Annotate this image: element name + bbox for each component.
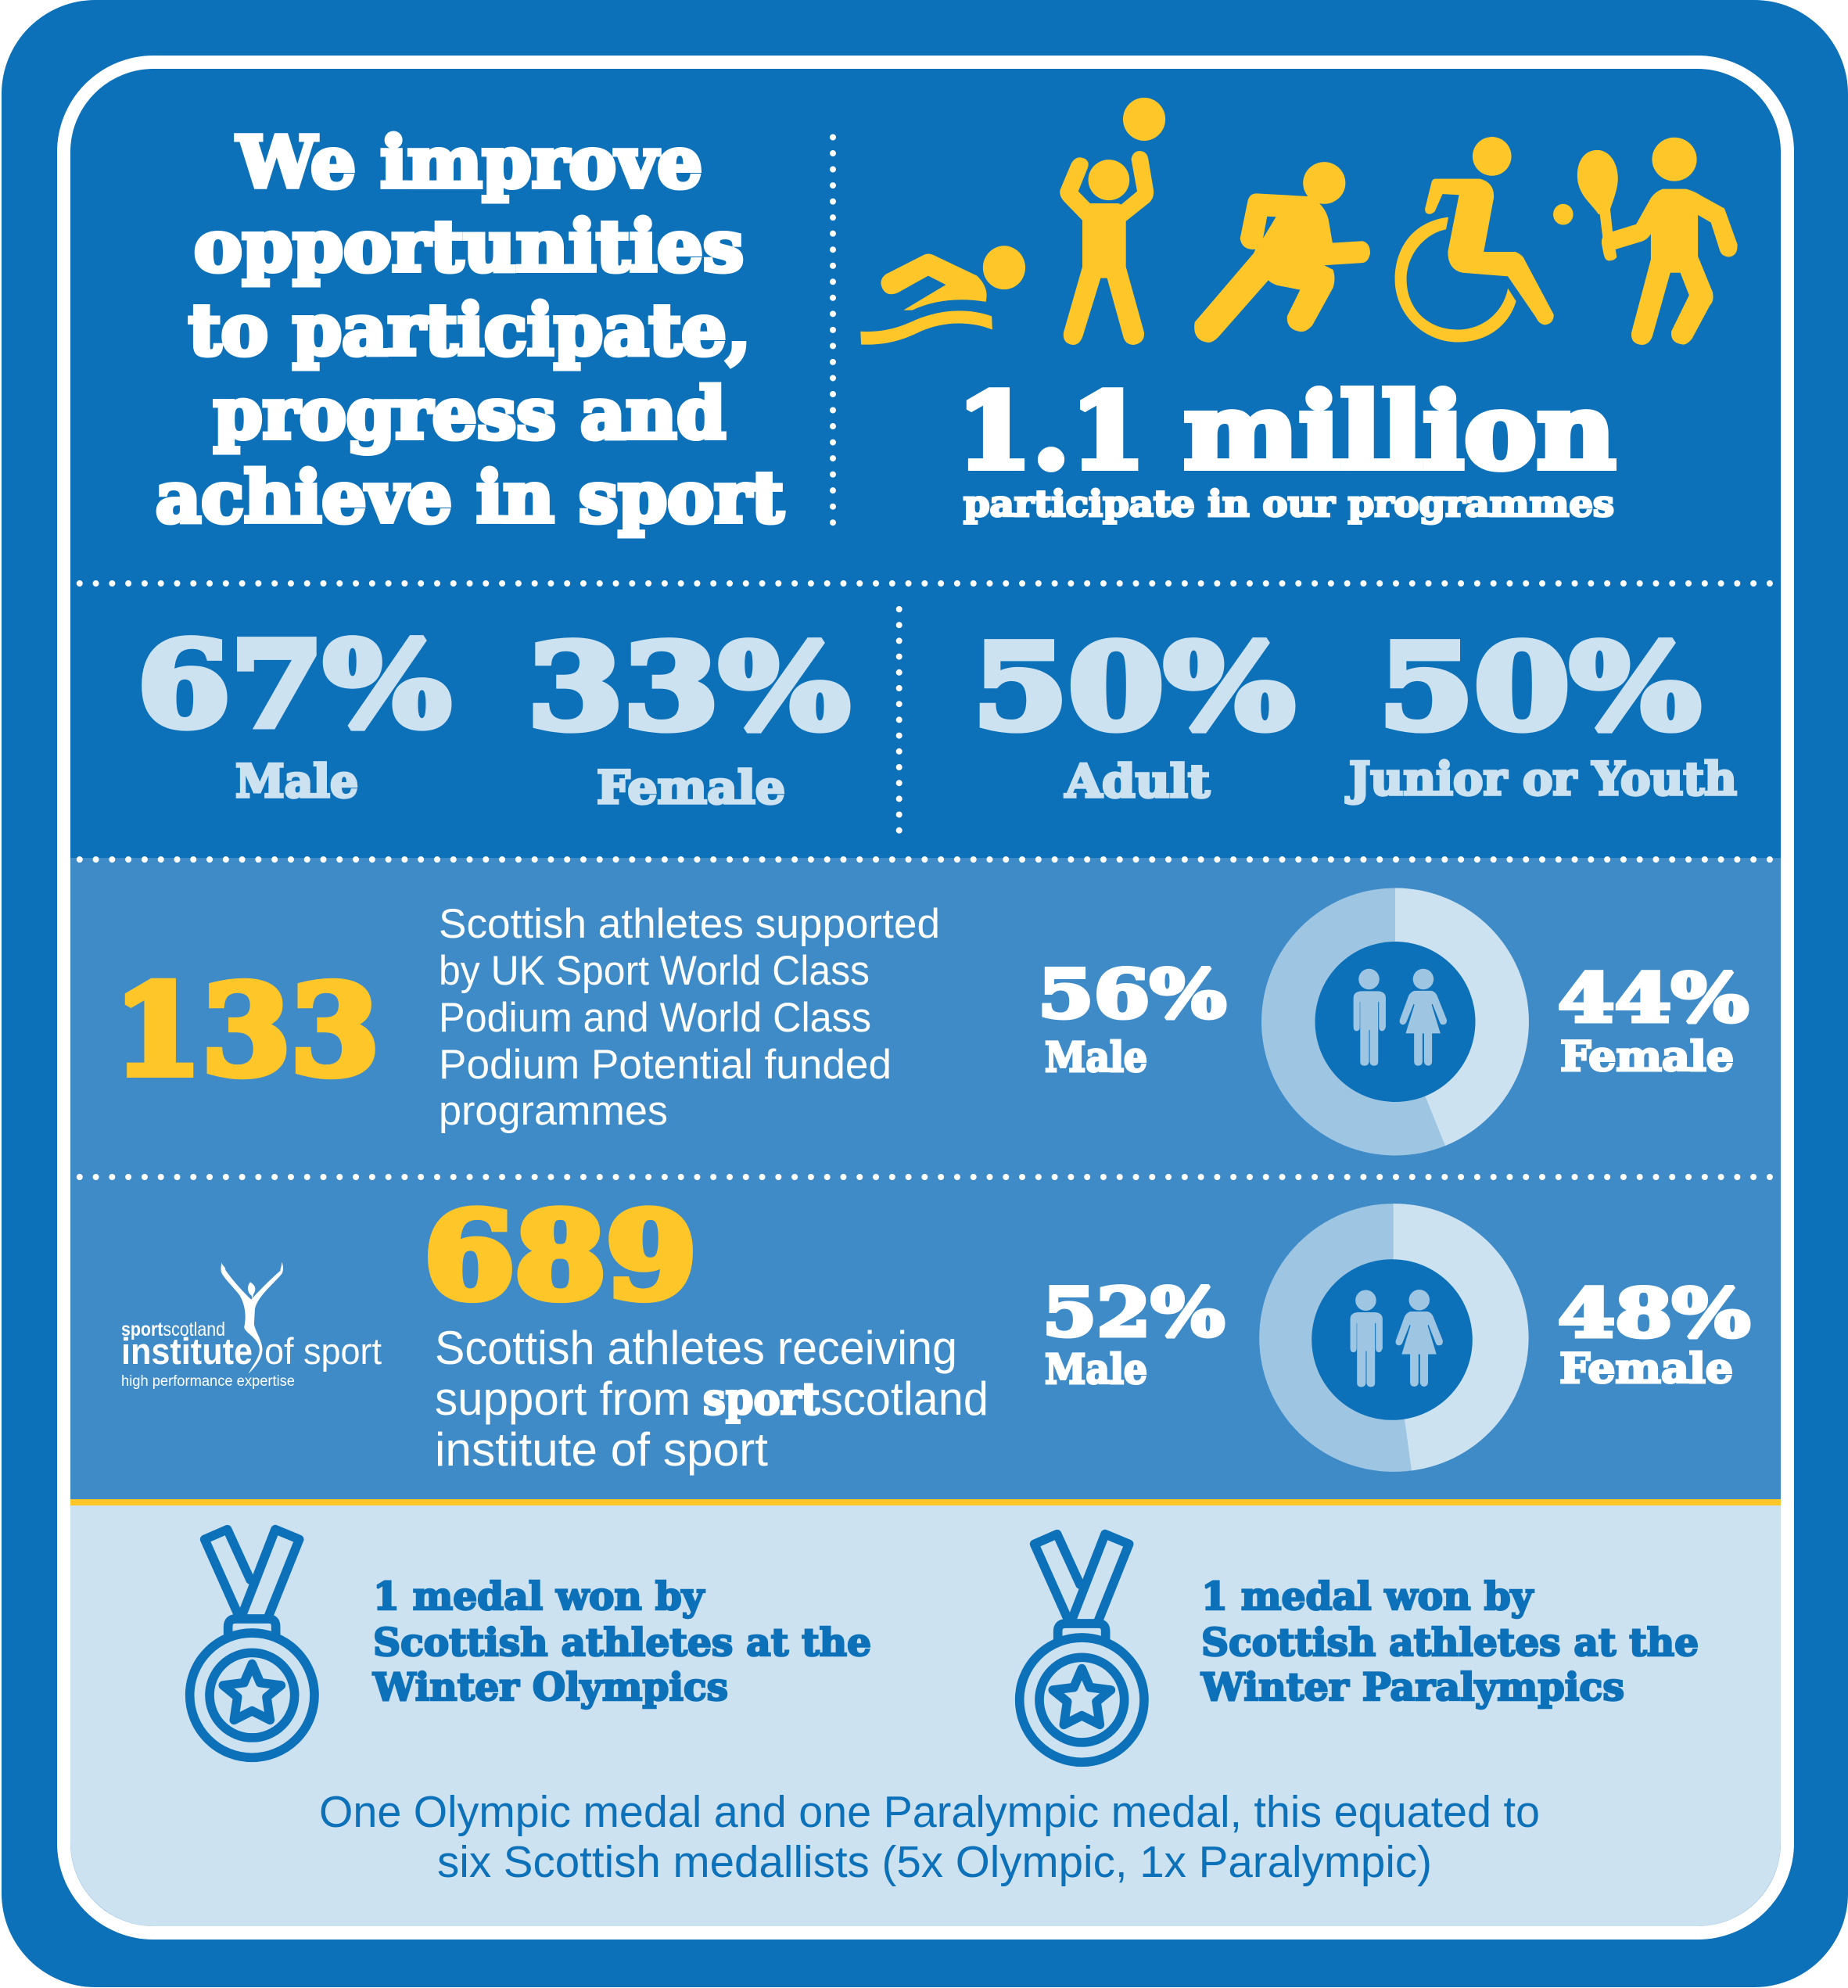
icon: runner [1194, 162, 1370, 343]
title: progress and [214, 372, 726, 455]
text: Winter Paralympics medal: Winter Paralympics [1200, 1664, 1624, 1710]
text: medal summary: One Olympic medal and one Paralympic medal, this equated to [319, 1787, 1540, 1837]
text: UK Sport athletes: Podium Potential funded [439, 1042, 892, 1088]
label: 44% female [1558, 960, 1749, 1081]
stat: 33% female [527, 619, 849, 814]
label: 48% female: Female [1559, 1345, 1733, 1393]
logo: sportscotland institute of sport: sportscotland [121, 1319, 225, 1340]
icon: volleyball player [1060, 98, 1165, 345]
donut chart: 52 male 48 female [1259, 1204, 1529, 1472]
logo: sportscotland institute of sport: of sport [264, 1330, 382, 1372]
logo: sportscotland institute of sport: high performance expertise [121, 1373, 295, 1390]
text: Winter Paralympics medal: Scottish athletes at the [1201, 1620, 1699, 1665]
label: 56% male: Male [1045, 1034, 1147, 1082]
icon: man and woman [1351, 1290, 1443, 1387]
label: 48% female: 48% [1558, 1275, 1750, 1353]
icon: man and woman [1354, 969, 1447, 1066]
title [156, 121, 784, 539]
donut chart: 56 male 44 female [1261, 888, 1529, 1156]
stat: 33% female: Female [597, 761, 785, 814]
number: 133: 133 [113, 959, 379, 1103]
text: UK Sport athletes: Podium and World Class [439, 995, 871, 1041]
number: 689: 689 [424, 1186, 697, 1326]
stat: 67% male: 67% [138, 616, 450, 754]
text: institute athletes: support from [435, 1373, 691, 1425]
label: 44% female: 44% [1558, 960, 1749, 1038]
stat: 50% adult: Adult [1064, 755, 1210, 808]
text: Winter Olympics medal: Scottish athletes at the [373, 1620, 871, 1665]
stat: 33% female: 33% [527, 619, 849, 756]
label: 48% female [1558, 1275, 1750, 1393]
logo figure [221, 1261, 283, 1374]
logo: sportscotland institute of sport: institute [121, 1330, 253, 1372]
title: achieve in sport [156, 456, 784, 539]
icon: Paralympic medal [1020, 1534, 1144, 1762]
stat: 50% adult [973, 619, 1295, 808]
stat: 67% male [138, 616, 450, 808]
text: UK Sport athletes: Scottish athletes supported [439, 901, 940, 947]
headline stat: 1.1 million: 1.1 million [956, 371, 1616, 493]
label: 52% male [1042, 1274, 1225, 1394]
text: Winter Olympics medal: 1 medal won by [373, 1574, 705, 1619]
stat: 50% adult: 50% [973, 619, 1295, 756]
panel: mid blue stats band [70, 858, 1781, 1499]
text: institute athletes: sport [703, 1373, 820, 1425]
text: institute athletes: institute of sport [435, 1423, 768, 1476]
stat: 50% junior or youth: Junior or Youth [1345, 752, 1737, 806]
text: Winter Olympics medal: Winter Olympics [372, 1664, 728, 1710]
title: to participate, [188, 289, 751, 371]
text: institute athletes [435, 1322, 989, 1476]
text: institute athletes: scotland [820, 1373, 989, 1425]
text: Winter Olympics medal [372, 1574, 871, 1710]
label: 56% male: 56% [1038, 956, 1226, 1034]
label: 56% male [1038, 956, 1226, 1082]
logo: sportscotland institute of sport [121, 1261, 382, 1390]
stat: 67% male: Male [235, 755, 358, 808]
title: We improve [236, 121, 702, 204]
text: UK Sport athletes [439, 901, 940, 1134]
text: medal summary [319, 1787, 1540, 1887]
icon: wheelchair athlete [1395, 137, 1554, 343]
stat: 50% junior or youth: 50% [1378, 619, 1700, 756]
stat: 50% junior or youth [1345, 619, 1737, 806]
text: UK Sport athletes: by UK Sport World Class [439, 948, 870, 994]
caption: participate in our programmes: participate in our programmes [963, 483, 1614, 525]
gold divider [70, 1499, 1781, 1505]
text: UK Sport athletes: programmes [439, 1088, 668, 1134]
text: Winter Paralympics medal [1200, 1574, 1699, 1710]
icon: tennis player [1553, 138, 1738, 345]
text: Winter Paralympics medal: 1 medal won by [1201, 1574, 1534, 1619]
text: institute athletes: Scottish athletes receiving [435, 1322, 957, 1374]
icon: Olympic medal [190, 1530, 314, 1757]
label: 52% male: Male [1045, 1346, 1147, 1394]
text: medal summary: six Scottish medallists (5x Olympic, 1x Paralympic) [437, 1837, 1432, 1887]
icons: five sports figures [860, 98, 1738, 345]
icon: swimmer [860, 246, 1025, 345]
title: opportunities [194, 205, 744, 288]
label: 52% male: 52% [1042, 1274, 1225, 1352]
panel: medals [70, 1505, 1781, 1926]
label: 44% female: Female [1560, 1033, 1734, 1081]
